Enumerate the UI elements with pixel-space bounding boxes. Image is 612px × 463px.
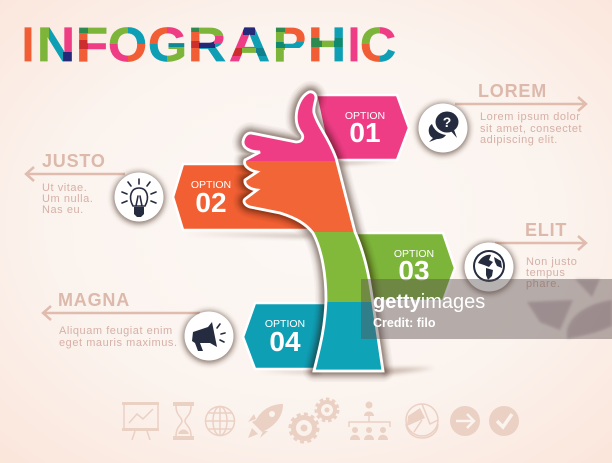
watermark: [361, 279, 612, 339]
ribbon shadows: [185, 161, 435, 375]
title: I: [348, 19, 360, 72]
title: [22, 19, 396, 72]
text block: justo: JUSTO: [42, 151, 106, 171]
watermark: Credit: filo: [373, 316, 436, 330]
icon: pie chart: [406, 404, 438, 438]
text block: magna: Aliquam feugiat enim: [59, 325, 173, 337]
text block: justo: Ut vitae.: [42, 182, 87, 194]
icon row: [122, 399, 519, 442]
arrow: lorem: [455, 97, 586, 111]
text block: elit: phare.: [526, 278, 560, 290]
text block: elit: [525, 220, 577, 290]
text block: lorem: adipiscing elit.: [480, 134, 558, 146]
text block: magna: [58, 290, 178, 349]
icon: hourglass: [173, 402, 194, 440]
text block: justo: Nas eu.: [42, 204, 84, 216]
icon: gears: [290, 399, 338, 442]
title: H: [308, 19, 346, 72]
watermark: gettyimages: [373, 291, 485, 313]
ribbon: option 04: 04: [269, 326, 301, 357]
icon: check circle: [489, 406, 519, 436]
ribbon: option 04: OPTION: [265, 318, 305, 330]
icon: megaphone: [183, 311, 235, 363]
ribbon: option 04: [243, 303, 330, 369]
text block: elit: ELIT: [525, 220, 567, 240]
arrow: magna: [43, 306, 200, 320]
ribbon: option 02: [173, 164, 315, 230]
arrow: justo: [26, 167, 125, 181]
icon: globe: [463, 242, 515, 294]
title: A: [229, 19, 270, 72]
title: C: [360, 19, 396, 72]
thumbs-up hand: [230, 85, 400, 372]
title: F: [76, 19, 108, 72]
text block: magna: eget mauris maximus.: [59, 337, 178, 349]
ribbon: option 02: 02: [195, 187, 227, 218]
title: P: [273, 19, 306, 72]
icon: presentation chart: [122, 402, 159, 440]
icon: light bulb: [113, 172, 165, 224]
text block: lorem: sit amet, consectet: [480, 123, 582, 135]
ribbon: option 02: OPTION: [191, 179, 231, 191]
ribbon: option 01: [316, 95, 409, 160]
title: G: [148, 19, 187, 72]
title: R: [188, 19, 226, 72]
title: O: [108, 19, 147, 72]
title: N: [37, 19, 75, 72]
text block: lorem: LOREM: [478, 81, 547, 101]
text block: elit: tempus: [526, 267, 565, 279]
icon: outline globe: [206, 406, 234, 436]
text block: lorem: [478, 81, 582, 146]
icon: org chart: [349, 402, 390, 440]
ribbon: option 03: OPTION: [394, 248, 434, 260]
ribbon: option 03: [350, 233, 455, 301]
title: I: [22, 19, 34, 72]
text block: justo: Um nulla.: [42, 193, 93, 205]
icon: arrow circle: [450, 406, 480, 436]
arrow: elit: [495, 236, 586, 250]
text block: elit: Non justo: [526, 256, 577, 268]
ribbon: option 01: 01: [349, 117, 381, 148]
icon: speech bubbles: ?: [443, 114, 451, 130]
icon: speech bubbles: [417, 103, 469, 155]
text block: magna: MAGNA: [58, 290, 130, 310]
ribbon: option 01: OPTION: [345, 110, 385, 122]
text block: justo: [42, 151, 106, 216]
ribbon: option 03: 03: [398, 255, 430, 286]
text block: lorem: Lorem ipsum dolor: [480, 111, 580, 123]
icon: rocket: [248, 404, 283, 438]
